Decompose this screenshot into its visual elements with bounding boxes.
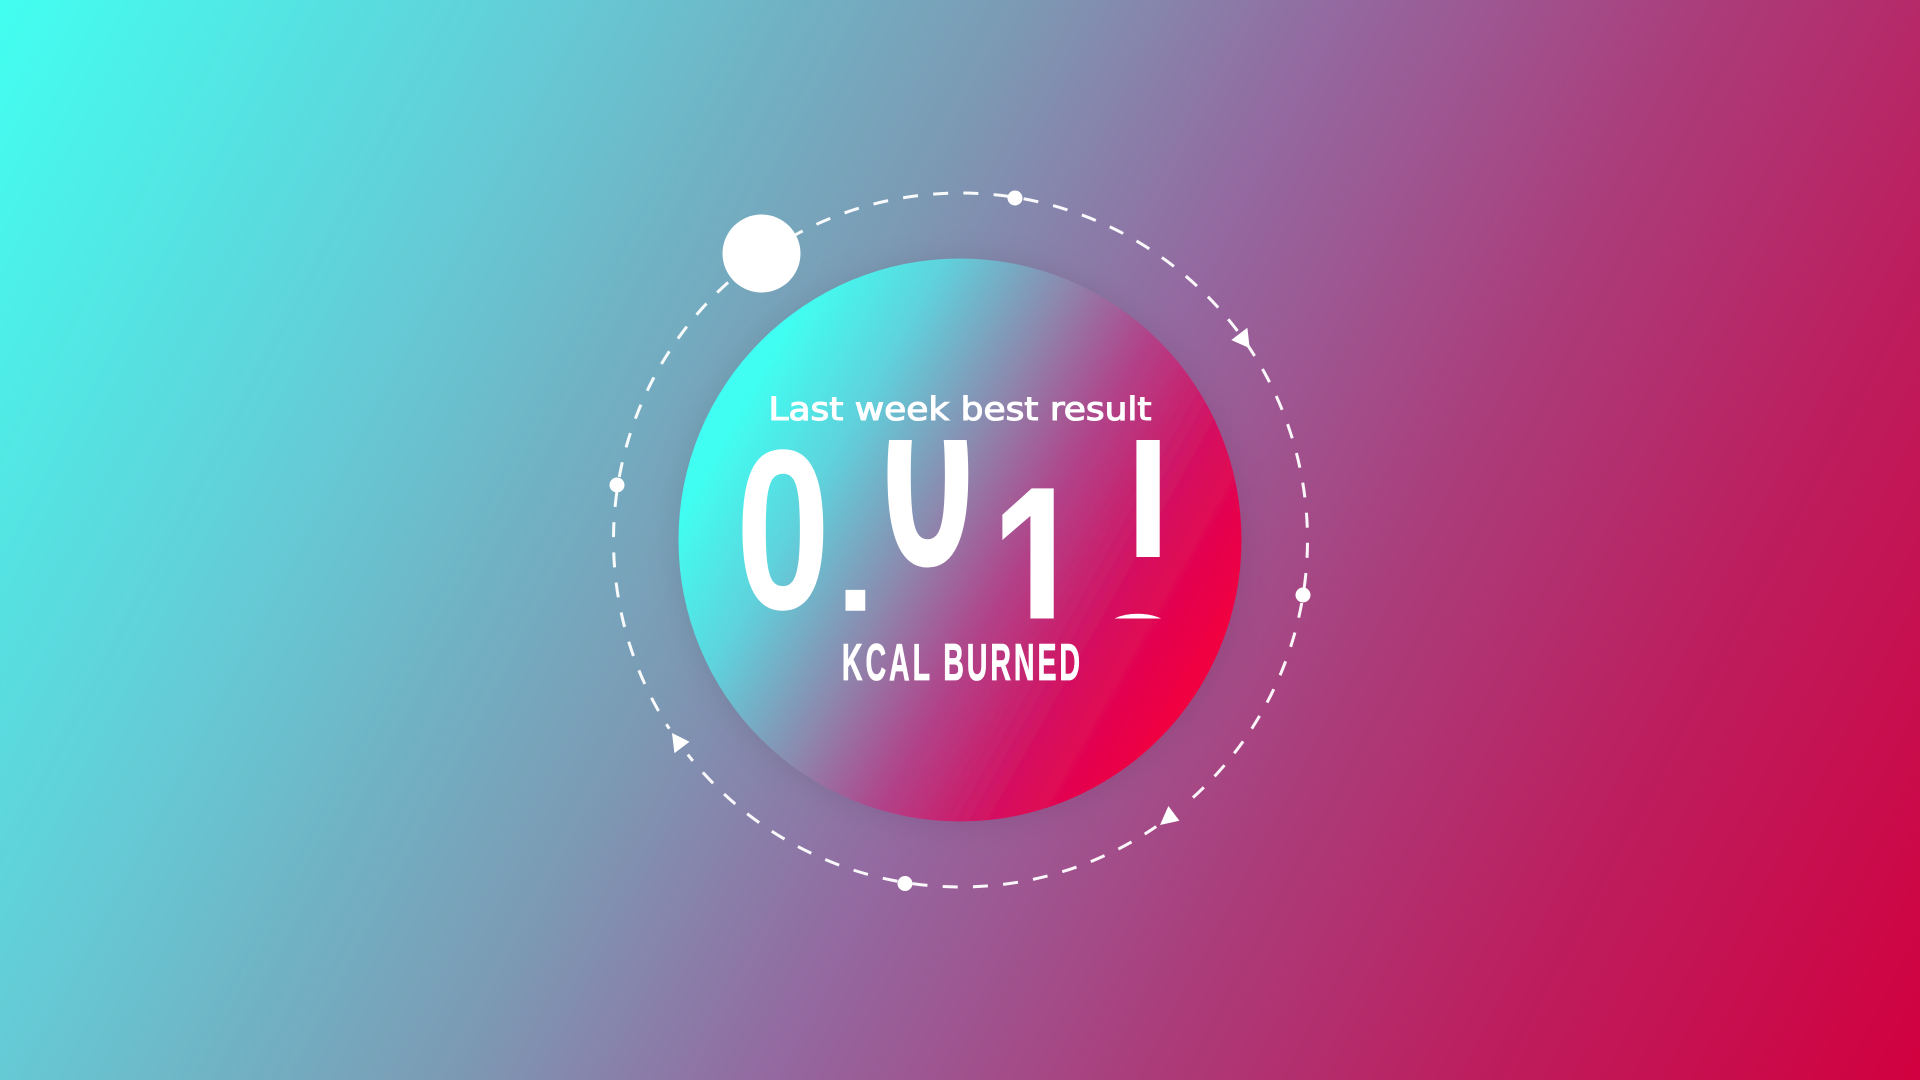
orbit dot: right	[1296, 588, 1310, 602]
arrow: lower left	[672, 733, 690, 753]
rolling counter value: 0	[881, 328, 975, 621]
rolling counter value: .	[836, 484, 875, 641]
rolling counter value: 0	[736, 402, 830, 657]
large white orbit ball	[722, 214, 800, 292]
heading: Last week best result	[768, 390, 1152, 428]
orbit dot: bottom	[898, 876, 912, 891]
rolling counter value: 1	[991, 438, 1085, 700]
central gradient circle	[678, 258, 1242, 822]
unit label: KCAL BURNED	[842, 633, 1080, 691]
dashed orbit ring	[614, 193, 1308, 887]
rolling counter value	[742, 440, 1161, 618]
infographic: progress ring	[610, 190, 1310, 891]
orbit dot: top	[1008, 190, 1022, 206]
arrow: lower right	[1160, 806, 1179, 825]
rolling counter value: 0	[1076, 567, 1200, 822]
rolling counter value: 1	[1097, 308, 1191, 664]
arrow: upper right	[1231, 328, 1250, 348]
orbit dot: left	[610, 478, 624, 492]
